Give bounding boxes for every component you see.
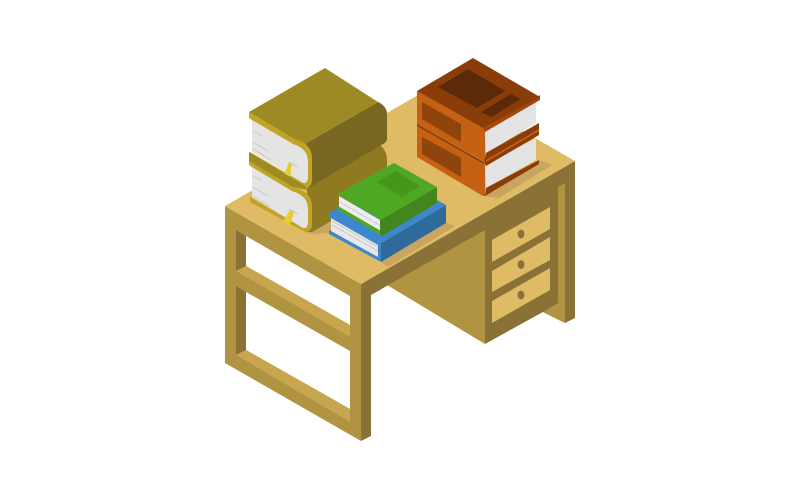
blue book right side xyxy=(381,205,446,262)
gap between brown books xyxy=(417,124,484,164)
lower olive book pages xyxy=(252,167,308,228)
drawer 2 xyxy=(492,237,550,292)
stack gap band xyxy=(249,152,307,190)
olive book stack xyxy=(249,68,387,232)
blue book pages xyxy=(331,216,379,258)
desk xyxy=(225,83,575,441)
lower olive book spine side xyxy=(307,143,387,232)
brown rim highlight xyxy=(486,129,539,162)
desk: cabinet side strip xyxy=(543,183,565,323)
desk: stretcher top face xyxy=(236,266,350,337)
green book pages xyxy=(339,196,380,233)
drawer 3 xyxy=(492,268,550,323)
desk: bottom rail top face xyxy=(236,350,350,422)
upper olive book cover rim xyxy=(249,112,312,188)
desk: upper window in left frame xyxy=(246,236,350,325)
desk: lower window in left frame xyxy=(246,292,350,409)
blue book page lines xyxy=(332,221,378,251)
lower olive book cover xyxy=(249,160,312,232)
lower brown book cover inset xyxy=(422,137,461,177)
lower brown book pages xyxy=(485,138,536,188)
book shadows on desk xyxy=(305,160,552,267)
top cover large inset xyxy=(438,69,505,108)
upper olive book bookmark xyxy=(283,162,292,181)
green book top cover xyxy=(337,163,437,220)
upper olive book top cover xyxy=(249,68,378,145)
desk: table top xyxy=(225,83,575,284)
brown book middle rims xyxy=(484,123,539,166)
green book lower rim xyxy=(338,206,382,236)
blue and green book stack xyxy=(329,163,446,262)
desk: right apron, leg and drawer cabinet xyxy=(361,161,575,441)
desk: inner leg upper shade xyxy=(236,230,246,271)
knob 2 xyxy=(518,260,524,269)
lower olive book bookmark xyxy=(283,210,294,227)
lower olive book page lines xyxy=(253,176,298,214)
green book right side xyxy=(380,187,437,236)
brown book stack xyxy=(417,58,540,196)
top cover small inset xyxy=(481,94,521,117)
upper olive book page lines xyxy=(253,131,298,167)
green book page line xyxy=(340,202,379,225)
upper brown book cover inset xyxy=(422,102,461,142)
desk: back modesty panel xyxy=(387,226,485,344)
upper olive book pages xyxy=(252,120,308,183)
upper brown book front cover xyxy=(417,91,485,161)
desk: left frame front xyxy=(225,206,361,441)
upper olive book spine side xyxy=(303,102,387,188)
blue book lower rim xyxy=(329,230,381,262)
desk: inner leg lower shade xyxy=(236,286,246,355)
upper brown book top cover xyxy=(417,58,540,128)
upper brown book pages xyxy=(485,102,536,153)
green book cover inset xyxy=(377,171,420,197)
lower brown book front cover xyxy=(417,126,485,196)
knob 1 xyxy=(518,230,524,238)
drawer 1 xyxy=(492,207,550,262)
lower brown book bottom rim xyxy=(485,160,539,196)
knob 3 xyxy=(518,291,524,299)
upper brown book top rim xyxy=(483,95,540,132)
blue book cover xyxy=(329,200,446,245)
